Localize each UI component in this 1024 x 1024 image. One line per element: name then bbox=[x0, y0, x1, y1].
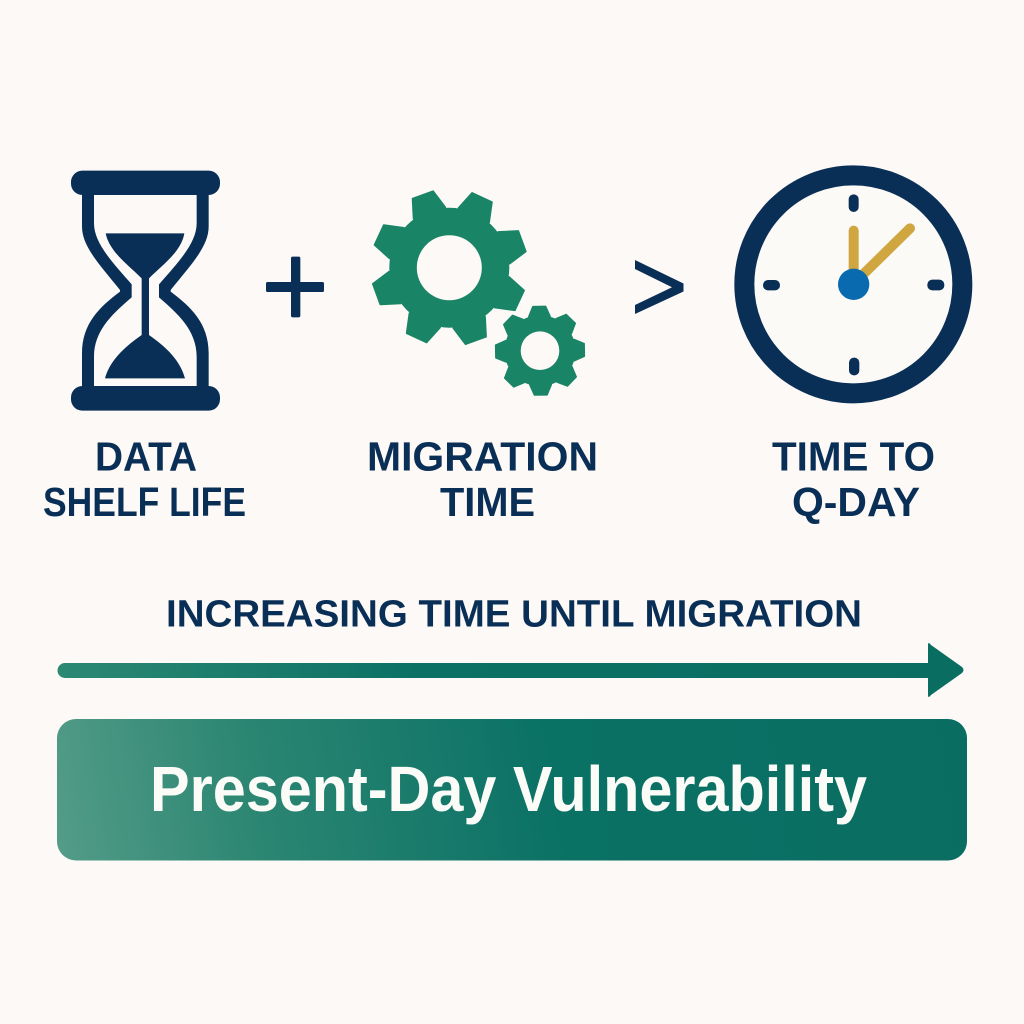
label: time to q-day: TIME TO bbox=[772, 434, 935, 480]
heading: increasing time until migration: INCREASING TIME UNTIL MIGRATION bbox=[166, 594, 862, 636]
label: data shelf life: DATA bbox=[95, 434, 197, 480]
label: time to q-day: Q-DAY bbox=[792, 479, 920, 525]
arrow: timeline bbox=[58, 643, 964, 697]
label: migration time: MIGRATION bbox=[367, 434, 598, 480]
icon: hourglass bbox=[71, 171, 220, 411]
icon: large gear bbox=[371, 189, 528, 346]
label: time to q-day bbox=[772, 434, 935, 525]
label: data shelf life bbox=[43, 434, 246, 525]
label: data shelf life: SHELF LIFE bbox=[43, 479, 246, 525]
label: migration time bbox=[367, 434, 598, 525]
icon: small gear bbox=[495, 306, 585, 395]
banner: present-day vulnerability bbox=[57, 719, 967, 860]
icon: greater-than sign bbox=[635, 260, 684, 314]
icon: clock bbox=[744, 175, 962, 393]
label: migration time: TIME bbox=[440, 479, 535, 525]
banner: present-day vulnerability: Present-Day Vulnerability bbox=[150, 753, 867, 825]
icon: plus sign bbox=[266, 257, 324, 317]
